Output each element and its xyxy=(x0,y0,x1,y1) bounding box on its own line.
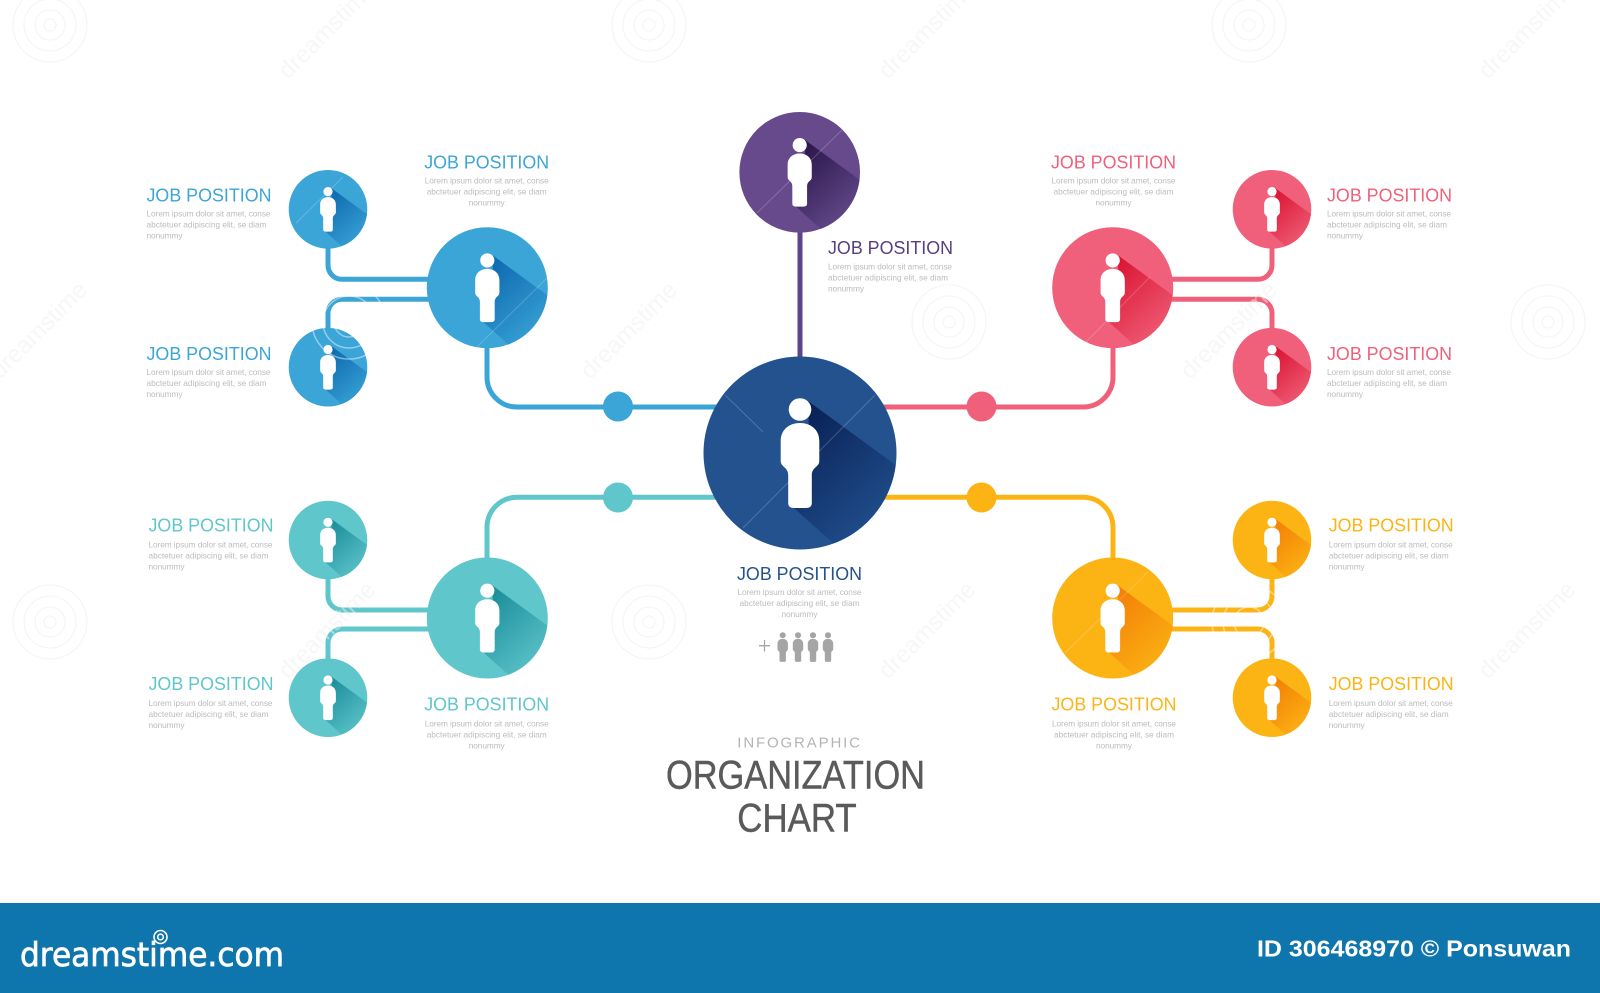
node: yellow bottom person xyxy=(1233,658,1311,737)
node: blue main person xyxy=(427,227,548,348)
connector: center to purple xyxy=(798,225,802,365)
connectors: yellow children xyxy=(1150,570,1272,670)
label: red main position: Lorem ipsum dolor sit amet, conse xyxy=(1052,175,1176,185)
label: blue bottom position: Lorem ipsum dolor sit amet, conse xyxy=(146,367,271,377)
label: teal bottom position: abctetuer adipiscing elit, se diam xyxy=(148,709,269,719)
label: yellow bottom position: Lorem ipsum dolor sit amet, conse xyxy=(1329,698,1453,708)
node: red top person xyxy=(1233,170,1311,249)
label: red top position xyxy=(1327,185,1452,240)
label: teal main position: abctetuer adipiscing elit, se diam xyxy=(427,730,547,740)
connectors: teal children xyxy=(328,570,440,670)
label: blue top position: abctetuer adipiscing elit, se diam xyxy=(146,220,267,230)
node: yellow main person xyxy=(1052,557,1173,679)
label: yellow bottom position: JOB POSITION xyxy=(1329,673,1454,694)
connector: center to teal branch xyxy=(487,497,720,560)
label: blue top position: nonummy xyxy=(146,230,183,240)
label: red bottom position: nonummy xyxy=(1327,389,1364,399)
label: yellow main position: Lorem ipsum dolor sit amet, conse xyxy=(1052,719,1176,729)
watermark overlay xyxy=(0,0,1585,684)
label: teal top position: nonummy xyxy=(148,562,185,572)
watermark overlay: dreamstime xyxy=(873,576,981,684)
label: blue main position: JOB POSITION xyxy=(424,151,549,172)
label: teal bottom position xyxy=(148,673,274,730)
title xyxy=(666,753,925,841)
label: teal top position: JOB POSITION xyxy=(148,515,274,536)
label: yellow bottom position xyxy=(1329,673,1454,730)
label: blue main position: Lorem ipsum dolor sit amet, conse xyxy=(425,175,549,185)
title: ORGANIZATION xyxy=(666,753,925,797)
label: center position: JOB POSITION xyxy=(737,563,862,584)
node: red bottom person xyxy=(1233,328,1311,406)
label: yellow top position xyxy=(1329,515,1454,572)
label: teal top position: Lorem ipsum dolor sit amet, conse xyxy=(148,540,273,550)
label: purple position: Lorem ipsum dolor sit amet, conse xyxy=(828,261,952,271)
watermark overlay: dreamstime xyxy=(273,576,381,684)
label: purple position: nonummy xyxy=(828,283,865,293)
label: teal main position: nonummy xyxy=(469,741,506,751)
label: red main position: JOB POSITION xyxy=(1051,151,1176,172)
label: red top position: nonummy xyxy=(1327,230,1364,240)
label: red top position: Lorem ipsum dolor sit amet, conse xyxy=(1327,209,1451,219)
node: blue bottom person xyxy=(289,328,367,406)
node: teal main person xyxy=(427,557,548,679)
watermark overlay: dreamstime xyxy=(1473,576,1581,684)
connector: center to red branch xyxy=(880,340,1113,407)
footer logo text: dreamstime.com xyxy=(20,935,284,974)
connector dot: blue xyxy=(603,392,633,422)
label: yellow main position: nonummy xyxy=(1096,741,1133,751)
label: center position: Lorem ipsum dolor sit amet, conse xyxy=(738,587,862,597)
label: yellow top position: abctetuer adipiscing elit, se diam xyxy=(1329,551,1449,561)
label: teal top position xyxy=(148,515,274,572)
label: yellow top position: JOB POSITION xyxy=(1329,515,1454,536)
label: blue bottom position: abctetuer adipiscing elit, se diam xyxy=(146,378,267,388)
connector dot: red xyxy=(966,392,996,422)
label: purple position: JOB POSITION xyxy=(828,237,953,258)
label: blue bottom position: nonummy xyxy=(146,389,183,399)
node: yellow top person xyxy=(1233,501,1311,579)
label: yellow top position: nonummy xyxy=(1329,562,1366,572)
label: teal bottom position: JOB POSITION xyxy=(148,673,274,694)
label: purple position xyxy=(828,237,953,293)
node: teal top person xyxy=(289,501,367,579)
label: red bottom position xyxy=(1327,343,1452,399)
label: red bottom position: Lorem ipsum dolor sit amet, conse xyxy=(1327,367,1451,377)
label: blue main position xyxy=(424,151,549,207)
connector dot: yellow xyxy=(966,482,996,512)
connectors: blue children xyxy=(328,240,440,340)
label: red main position xyxy=(1051,151,1176,207)
connector: center to yellow branch xyxy=(880,497,1113,560)
label: yellow main position xyxy=(1052,694,1176,751)
label: blue bottom position: JOB POSITION xyxy=(146,343,272,364)
node: teal bottom person xyxy=(289,658,367,737)
label: purple position: abctetuer adipiscing elit, se diam xyxy=(828,272,948,282)
footer logo spiral xyxy=(154,930,167,944)
label: yellow main position: JOB POSITION xyxy=(1052,694,1176,715)
label: red main position: nonummy xyxy=(1096,197,1132,207)
label: teal top position: abctetuer adipiscing elit, se diam xyxy=(148,551,269,561)
label: center position: nonummy xyxy=(782,609,818,619)
icon: plus four staff members xyxy=(759,632,833,662)
label: blue top position xyxy=(146,185,272,240)
title: CHART xyxy=(737,797,857,841)
label: yellow bottom position: abctetuer adipiscing elit, se diam xyxy=(1329,709,1449,719)
watermark overlay: dreamstime xyxy=(575,276,683,384)
label: yellow top position: Lorem ipsum dolor sit amet, conse xyxy=(1329,540,1453,550)
connectors: red children xyxy=(1150,240,1272,340)
label: blue main position: abctetuer adipiscing elit, se diam xyxy=(427,186,547,196)
label: red bottom position: abctetuer adipiscing elit, se diam xyxy=(1327,378,1447,388)
connector: center to blue branch xyxy=(487,340,720,407)
label: red top position: JOB POSITION xyxy=(1327,185,1452,206)
label: yellow main position: abctetuer adipiscing elit, se diam xyxy=(1054,730,1174,740)
label: teal main position: JOB POSITION xyxy=(424,694,549,715)
label: blue top position: Lorem ipsum dolor sit amet, conse xyxy=(146,209,271,219)
label: red main position: abctetuer adipiscing elit, se diam xyxy=(1054,186,1174,196)
label: yellow bottom position: nonummy xyxy=(1329,720,1366,730)
node: center navy person xyxy=(704,356,896,550)
node: purple person xyxy=(739,112,860,233)
label: red top position: abctetuer adipiscing elit, se diam xyxy=(1327,220,1447,230)
label: teal main position: Lorem ipsum dolor sit amet, conse xyxy=(425,719,549,729)
label: center position xyxy=(737,563,862,619)
node: red main person xyxy=(1052,227,1173,348)
label: teal bottom position: Lorem ipsum dolor sit amet, conse xyxy=(148,698,273,708)
connector dot: teal xyxy=(603,482,633,512)
label: red bottom position: JOB POSITION xyxy=(1327,343,1452,364)
watermark overlay: dreamstime xyxy=(1175,276,1283,384)
subtitle: INFOGRAPHIC xyxy=(737,734,860,751)
label: blue main position: nonummy xyxy=(469,197,506,207)
label: blue top position: JOB POSITION xyxy=(146,185,272,206)
footer credit: ID 306468970 © Ponsuwan xyxy=(1257,936,1571,962)
label: blue bottom position xyxy=(146,343,272,399)
label: teal bottom position: nonummy xyxy=(148,720,185,730)
label: teal main position xyxy=(424,694,549,751)
footer bar xyxy=(0,903,1600,993)
label: center position: abctetuer adipiscing elit, se diam xyxy=(740,598,860,608)
node: blue top person xyxy=(289,170,367,249)
